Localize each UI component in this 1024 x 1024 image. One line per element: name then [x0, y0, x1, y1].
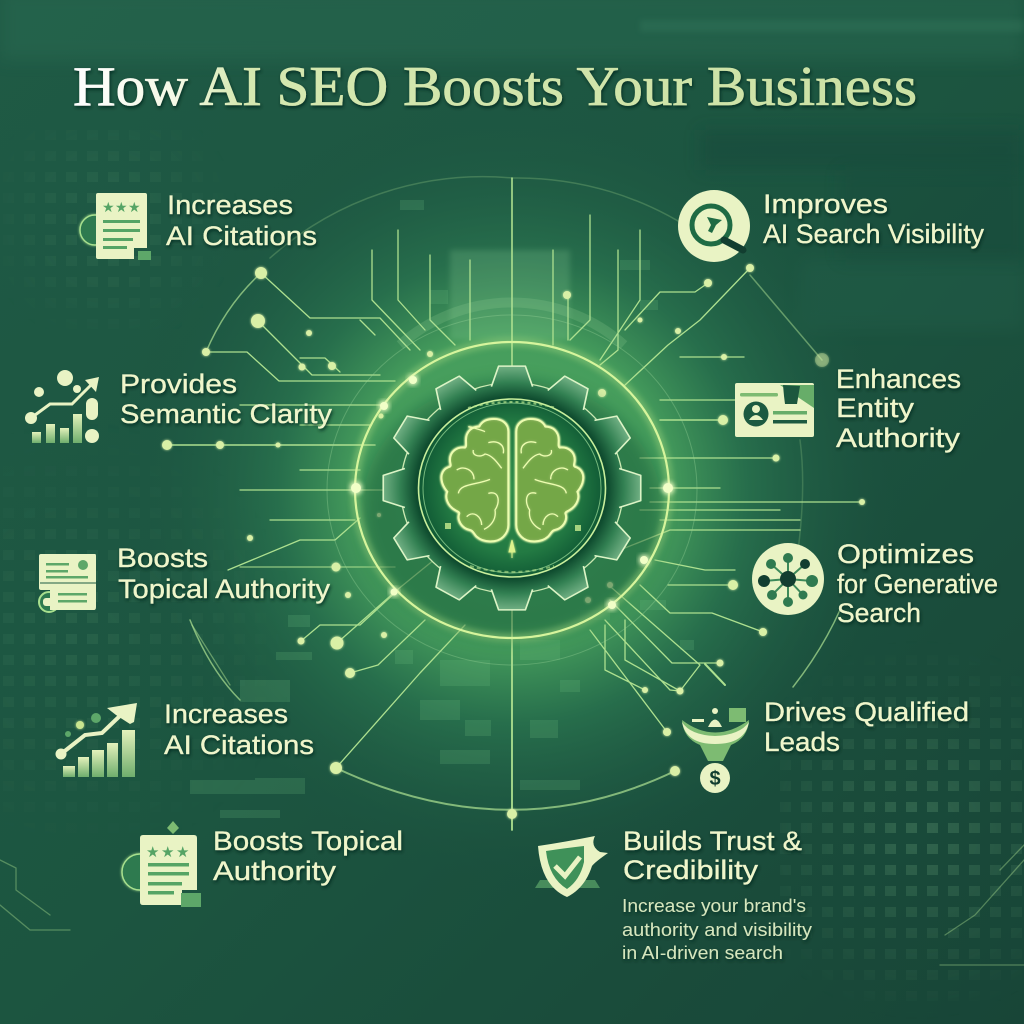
label: enhances entity authority: Entity [836, 393, 915, 423]
corner traces [0, 845, 1024, 965]
outer arcs [190, 177, 840, 810]
text block: description: Increase your brand's [622, 896, 806, 916]
label: improves AI search visibility [763, 189, 984, 249]
icon: document with stars [80, 193, 151, 260]
text block: description [622, 896, 812, 963]
label: drives qualified leads [764, 697, 969, 757]
text block: description: authority and visibility [622, 920, 812, 940]
label: improves AI search visibility: Improves [763, 189, 888, 219]
icon: chart with arrow and nodes [25, 370, 99, 443]
label: optimizes for generative search: for Generative [837, 569, 998, 599]
icon: stars document lower: ★ [176, 843, 189, 861]
brain right hemisphere [516, 419, 583, 541]
gear teeth [383, 366, 641, 610]
label: increases AI citations lower [164, 699, 314, 760]
label: builds trust and credibility [623, 826, 802, 885]
icon: funnel with dollar [682, 708, 749, 793]
label: provides semantic clarity: Semantic Clarity [120, 399, 333, 429]
central glow rings [327, 302, 697, 665]
center verticals [511, 178, 513, 366]
label: increases AI citations lower: AI Citations [164, 730, 314, 760]
icon: chat documents [39, 554, 96, 612]
label: boosts topical authority: Topical Authority [118, 574, 331, 604]
label: increases AI citations [166, 190, 317, 251]
label: boosts topical authority lower [213, 826, 403, 886]
icon: stars document lower: ★ [161, 843, 174, 861]
icon: shield with check [535, 836, 608, 897]
label: boosts topical authority [117, 543, 331, 604]
icon: document with stars: ★ [102, 200, 115, 216]
label: drives qualified leads: Leads [764, 727, 840, 757]
brain left hemisphere [441, 419, 508, 541]
icon: stars document lower: ★ [146, 843, 159, 861]
label: optimizes for generative search: Optimizes [837, 539, 974, 569]
title: How AI SEO Boosts Your Business [73, 56, 917, 118]
label: enhances entity authority: Authority [836, 423, 961, 453]
icon: growth bar chart with arrow [56, 703, 137, 777]
label: builds trust and credibility: Credibility [623, 855, 759, 885]
label: boosts topical authority lower: Authority [213, 856, 337, 886]
label: optimizes for generative search: Search [837, 598, 921, 628]
icon: document with stars: ★ [115, 200, 128, 216]
icon: document with stars: ★ [128, 200, 141, 216]
label: boosts topical authority: Boosts [117, 543, 208, 573]
label: optimizes for generative search [837, 539, 998, 628]
circuit lines and nodes [0, 177, 1024, 965]
right circuit lines [625, 283, 708, 330]
brain core disc [418, 399, 606, 577]
left circuit lines [206, 352, 395, 381]
label: increases AI citations lower: Increases [164, 699, 288, 729]
text block: description: in AI-driven search [622, 943, 783, 963]
gear [383, 366, 641, 610]
icon: funnel with dollar: $ [709, 768, 721, 790]
label: drives qualified leads: Drives Qualified [764, 697, 969, 727]
label: increases AI citations: Increases [167, 190, 293, 220]
icon: brain [441, 419, 583, 541]
icon: improves search magnifier [678, 190, 750, 262]
label: provides semantic clarity [120, 369, 333, 429]
label: provides semantic clarity: Provides [120, 369, 237, 399]
label: improves AI search visibility: AI Search Visibility [763, 219, 984, 249]
label: enhances entity authority [836, 364, 961, 453]
circuit nodes [162, 264, 865, 819]
label: builds trust and credibility: Builds Trust & [623, 826, 802, 856]
icon: ID card [735, 383, 814, 437]
label: increases AI citations: AI Citations [166, 221, 317, 251]
icon: network hub [752, 543, 824, 615]
icon: stars document lower [122, 821, 201, 907]
label: enhances entity authority: Enhances [836, 364, 961, 394]
label: boosts topical authority lower: Boosts Topical [213, 826, 403, 856]
